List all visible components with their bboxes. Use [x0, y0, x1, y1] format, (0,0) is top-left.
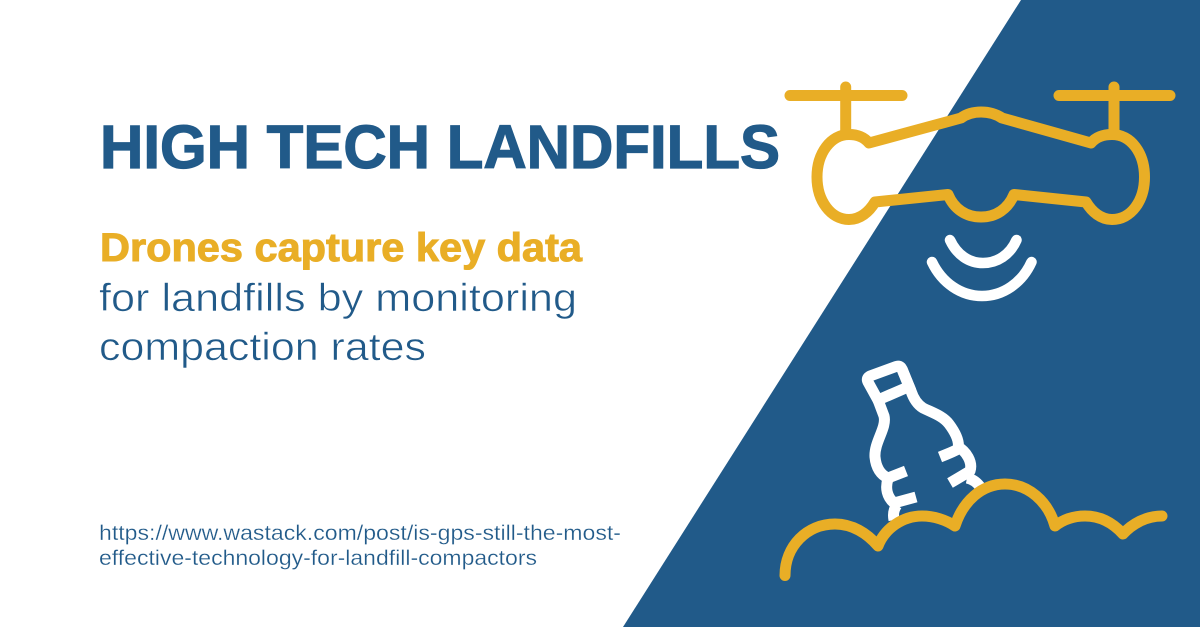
subtitle block: [99, 226, 583, 369]
URL line 2: effective-technology-for-landfill-compactors: [99, 547, 537, 570]
drone body: [817, 112, 1144, 220]
subtitle line 2: for landfills by monitoring: [99, 277, 577, 320]
icon: plastic bottle: [867, 366, 981, 520]
icon: drone: [790, 87, 1170, 220]
icon: landfill mound: [785, 484, 1162, 576]
icon: signal waves: [932, 240, 1032, 296]
blue diagonal panel: [623, 0, 1200, 627]
URL line 1: https://www.wastack.com/post/is-gps-still-the-most-: [99, 522, 621, 545]
subtitle highlight: Drones capture key data: [100, 226, 583, 270]
left propeller: [790, 87, 902, 131]
inner wave: [950, 240, 1016, 263]
bottle left side: [875, 400, 916, 520]
subtitle line 3: compaction rates: [99, 326, 426, 369]
source URL: [99, 522, 621, 570]
title: HIGH TECH LANDFILLS: [100, 113, 780, 181]
outer wave: [932, 262, 1032, 296]
bottle cap: [867, 366, 911, 402]
right propeller: [1059, 87, 1170, 131]
bottle right side: [902, 369, 981, 488]
